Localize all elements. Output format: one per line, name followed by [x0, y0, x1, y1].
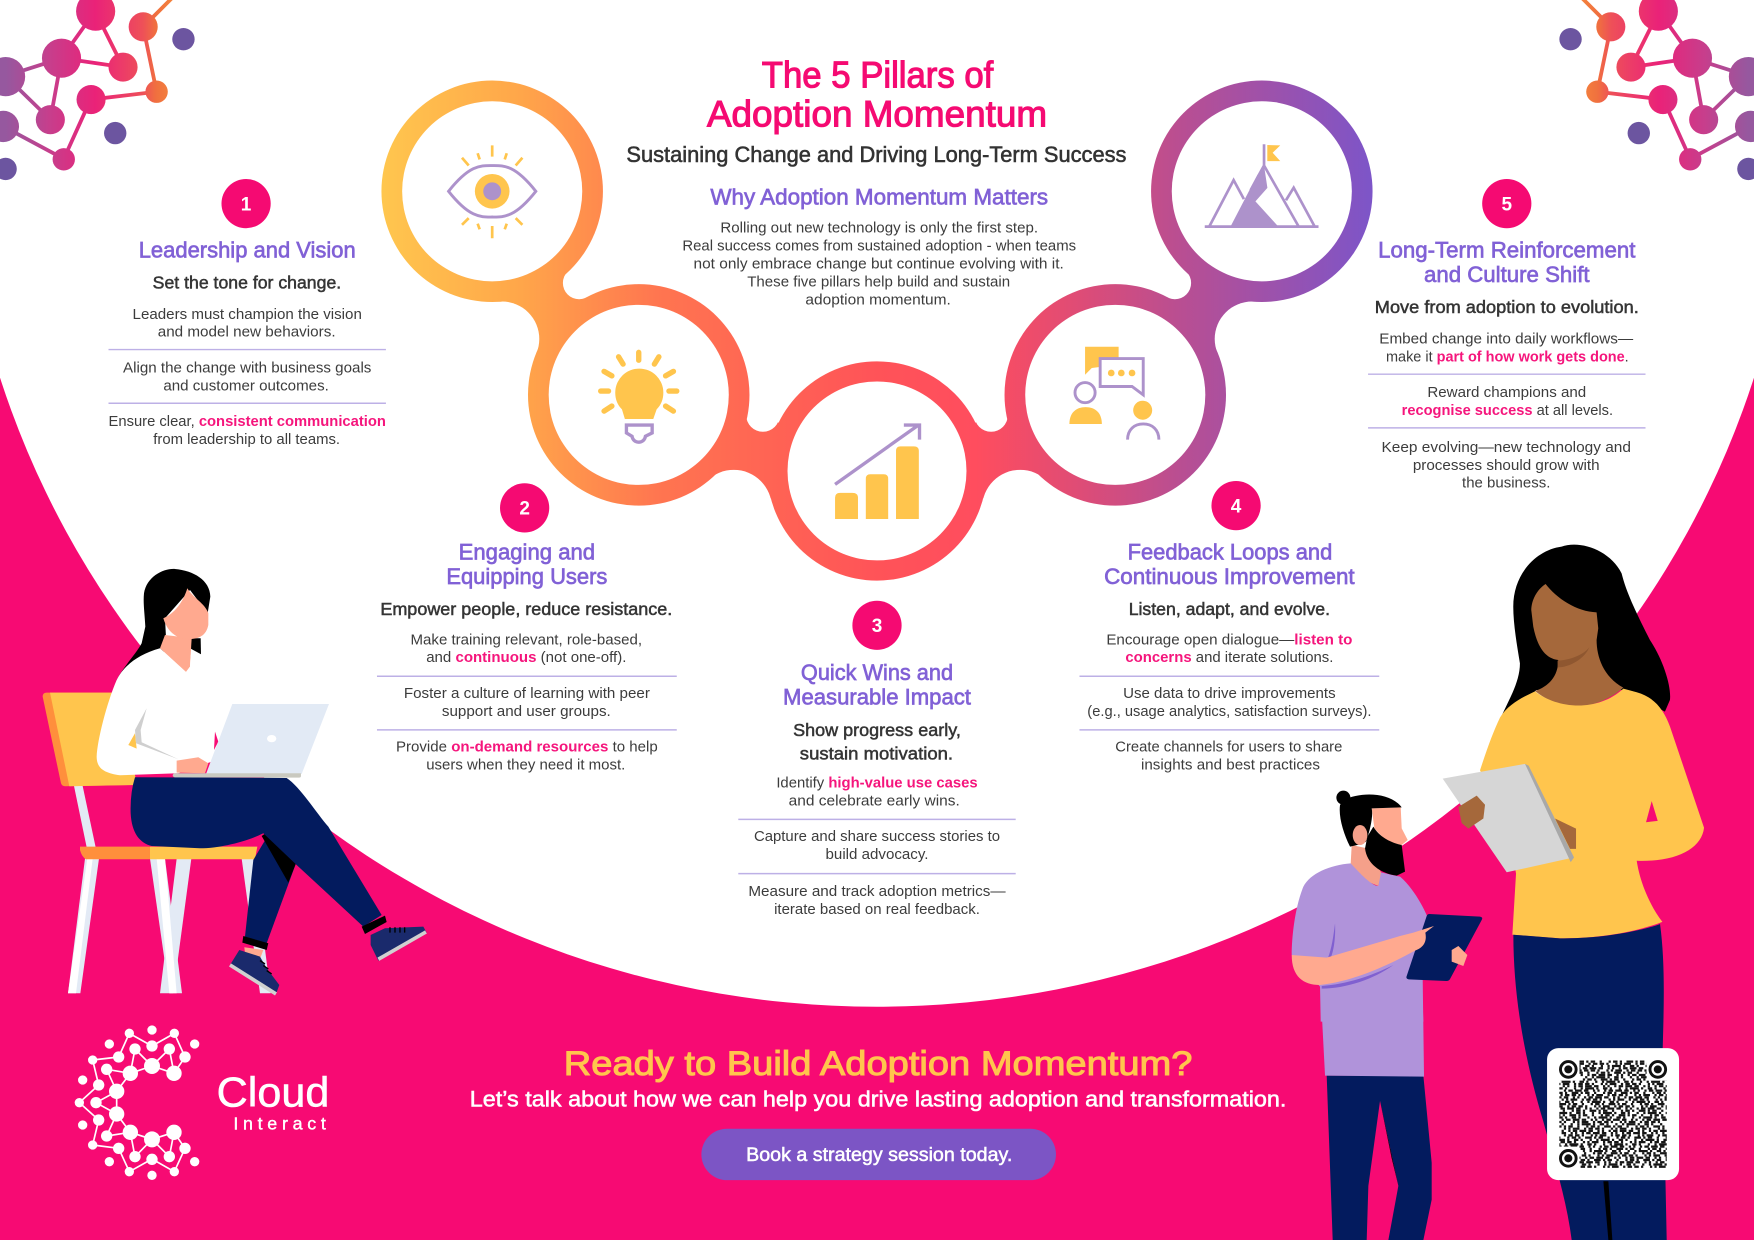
- bullet text: make it part of how work gets done.: [1386, 348, 1629, 365]
- trousers: [131, 777, 387, 950]
- face and neck: [1531, 584, 1623, 707]
- bullet text: [109, 306, 386, 448]
- bullet text: Embed change into daily workflows—: [1379, 330, 1634, 347]
- button: [701, 1129, 1056, 1180]
- icon: mountain with flag: [1205, 144, 1319, 227]
- intro: why adoption momentum matters: adoption momentum.: [805, 291, 951, 308]
- title: [707, 54, 1047, 134]
- heading: [1378, 237, 1636, 287]
- hair: [1500, 545, 1670, 720]
- panel: pillar 4 feedback loops and continuous improvement: [1079, 481, 1379, 774]
- number badge 3: [852, 601, 902, 650]
- yellow sweater: [1480, 689, 1704, 938]
- number badge 4: 4: [1231, 496, 1242, 517]
- laptop: [173, 704, 329, 778]
- title: Adoption Momentum: [707, 93, 1047, 134]
- bullet text: [738, 775, 1016, 918]
- bullet text: processes should grow with: [1413, 457, 1600, 474]
- heading: Feedback Loops and: [1128, 539, 1332, 564]
- icon: light bulb: [601, 352, 677, 442]
- bullet text: (e.g., usage analytics, satisfaction surveys).: [1087, 703, 1371, 720]
- heading: Quick Wins and: [801, 660, 953, 685]
- trousers: [1513, 924, 1667, 1240]
- illustration: man with beard and tablet: [1292, 791, 1482, 1240]
- intro: why adoption momentum matters: These five pillars help build and sustain: [747, 273, 1010, 290]
- bullet text: Align the change with business goals: [123, 360, 372, 377]
- heading: Leadership and Vision: [139, 237, 356, 262]
- bullet text: Keep evolving—new technology and: [1381, 439, 1631, 456]
- tagline: Show progress early,: [793, 720, 961, 740]
- button: Book a strategy session today.: [746, 1145, 1012, 1166]
- panel: pillar 3 quick wins and measurable impact: [738, 601, 1016, 918]
- logo wordmark: [217, 1070, 331, 1133]
- number badge 5: [1482, 179, 1531, 228]
- neck: [160, 635, 192, 672]
- call to action: [470, 1045, 1286, 1180]
- bullet text: support and user groups.: [442, 703, 611, 720]
- chair glimpse under arm: [128, 733, 137, 749]
- bullet text: concerns and iterate solutions.: [1125, 649, 1333, 666]
- illustration: standing woman with tablet: [1443, 545, 1704, 1240]
- icon: eye: [449, 145, 536, 238]
- bullet text: [1368, 330, 1645, 492]
- CTA text: Let’s talk about how we can help you drive lasting adoption and transformation.: [470, 1086, 1286, 1111]
- bullet text: Reward champions and: [1427, 384, 1586, 401]
- bullet text: and customer outcomes.: [163, 377, 329, 394]
- bullet text: Identify high-value use cases: [776, 775, 978, 792]
- bullet text: Leaders must champion the vision: [133, 306, 362, 323]
- heading: [783, 660, 972, 710]
- heading: [446, 539, 607, 589]
- tablet: [1406, 914, 1482, 981]
- bullet text: Create channels for users to share: [1115, 739, 1342, 756]
- bullet text: Ensure clear, consistent communication: [109, 413, 386, 430]
- bullet text: users when they need it most.: [426, 757, 625, 774]
- bullet text: Foster a culture of learning with peer: [404, 685, 650, 702]
- tagline: Move from adoption to evolution.: [1375, 297, 1639, 317]
- face: [1372, 807, 1408, 845]
- icon: rising bar chart: [835, 425, 920, 519]
- neck: [1351, 845, 1382, 886]
- face: [163, 588, 208, 639]
- bullet text: Encourage open dialogue—listen to: [1106, 631, 1352, 648]
- panel: pillar 5 long-term reinforcement and culture shift: [1368, 179, 1645, 492]
- icon: people in conversation: [1069, 347, 1159, 440]
- illustration: woman seated at laptop: [43, 569, 427, 994]
- number badge 1: 1: [241, 194, 252, 215]
- bullet text: and celebrate early wins.: [789, 792, 960, 809]
- bullet text: Provide on-demand resources to help: [396, 739, 658, 756]
- bullet text: from leadership to all teams.: [153, 431, 340, 448]
- logo mark: [75, 1025, 199, 1180]
- bullet text: build advocacy.: [826, 846, 928, 863]
- purple shirt: [1292, 863, 1427, 1022]
- gradient ring chain connecting the five pillar icons: [381, 81, 1373, 581]
- tagline: Listen, adapt, and evolve.: [1129, 599, 1330, 619]
- shirt shadow: [135, 708, 178, 759]
- hair and beard: [1336, 791, 1405, 876]
- bullet text: Use data to drive improvements: [1123, 685, 1336, 702]
- hair: [117, 569, 210, 680]
- tagline: [793, 720, 961, 764]
- intro: why adoption momentum matters: [682, 185, 1076, 308]
- number badge 2: [500, 483, 549, 532]
- intro: why adoption momentum matters: not only embrace change but continue evolving with it.: [694, 255, 1064, 272]
- panel: pillar 1 leadership and vision: [109, 179, 386, 448]
- heading: Continuous Improvement: [1104, 564, 1355, 589]
- tagline: sustain motivation.: [800, 744, 953, 764]
- heading: Measurable Impact: [783, 685, 972, 710]
- chair: [43, 693, 271, 993]
- hand: [177, 757, 208, 773]
- heading: and Culture Shift: [1424, 262, 1590, 287]
- bullet text: recognise success at all levels.: [1402, 402, 1613, 419]
- tagline: Empower people, reduce resistance.: [380, 599, 672, 619]
- bullet text: insights and best practices: [1141, 757, 1320, 774]
- heading: [1104, 539, 1355, 589]
- lower body: [1320, 979, 1432, 1240]
- intro: why adoption momentum matters: Why Adoption Momentum Matters: [710, 185, 1048, 210]
- bullet text: and model new behaviors.: [158, 324, 336, 341]
- bullet text: [377, 631, 677, 774]
- number badge 2: 2: [519, 499, 530, 520]
- logo: Cloud Interact: [75, 1025, 331, 1180]
- bullet text: iterate based on real feedback.: [774, 901, 980, 918]
- panel: pillar 2 engaging and equipping users: [377, 483, 677, 774]
- logo wordmark: Cloud: [217, 1070, 329, 1116]
- shoes: [230, 927, 427, 994]
- bullet text: Capture and share success stories to: [754, 828, 1000, 845]
- CTA heading: Ready to Build Adoption Momentum?: [564, 1045, 1192, 1083]
- bullet text: the business.: [1462, 475, 1550, 492]
- pink gap near laptop: [214, 732, 218, 750]
- intro: why adoption momentum matters: Rolling out new technology is only the first step.: [720, 220, 1038, 237]
- number badge 4: [1211, 481, 1261, 530]
- title: The 5 Pillars of: [762, 54, 994, 95]
- intro: why adoption momentum matters: Real success comes from sustained adoption - when teams: [682, 238, 1076, 255]
- bullet text: and continuous (not one-off).: [426, 649, 626, 666]
- arm and hands: [1292, 926, 1434, 985]
- bullet text: Measure and track adoption metrics—: [748, 883, 1006, 900]
- molecule decoration: top left: [0, 0, 195, 180]
- tagline: Set the tone for change.: [153, 273, 341, 293]
- subtitle: Sustaining Change and Driving Long-Term Success: [626, 142, 1127, 167]
- upper body: [1292, 791, 1482, 1022]
- molecule decoration: top right: [1559, 0, 1754, 180]
- white shirt: [97, 648, 233, 775]
- logo wordmark: Interact: [233, 1113, 331, 1133]
- bullet text: Make training relevant, role-based,: [411, 631, 642, 648]
- QR code card: [1547, 1048, 1679, 1180]
- heading: Engaging and: [459, 539, 595, 564]
- tablet and hands: [1443, 764, 1576, 872]
- heading: Long-Term Reinforcement: [1378, 237, 1636, 262]
- heading: Equipping Users: [446, 564, 607, 589]
- number badge 1: [221, 179, 271, 228]
- number badge 3: 3: [872, 616, 882, 637]
- bullet text: [1079, 631, 1379, 774]
- number badge 5: 5: [1501, 194, 1512, 215]
